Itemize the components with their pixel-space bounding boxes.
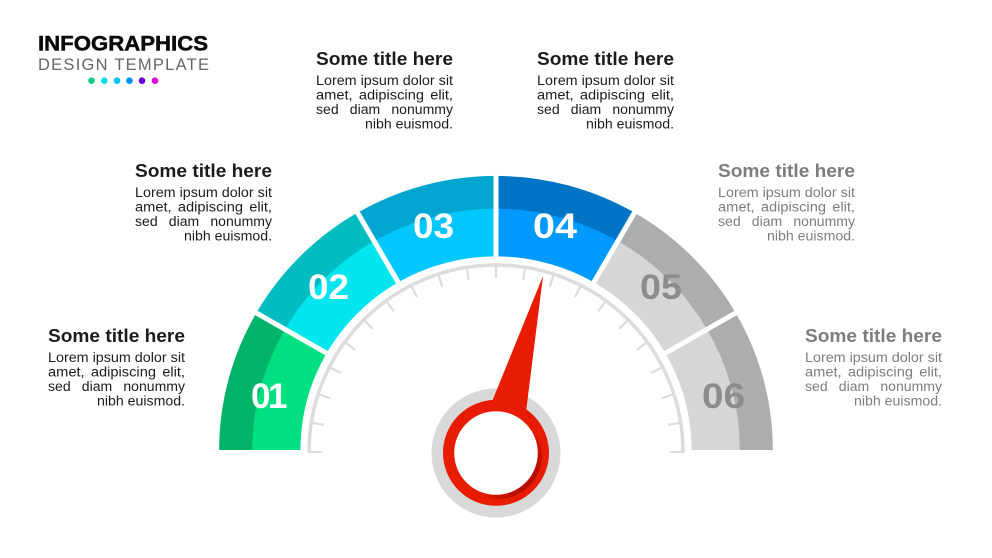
text block 2: amet, adipiscing elit, xyxy=(135,200,272,214)
text block 5: Lorem ipsum dolor sit xyxy=(718,185,855,200)
needle xyxy=(491,276,543,412)
hub white centre xyxy=(454,411,538,495)
hub red ring xyxy=(443,400,549,506)
text block 5: Some title here xyxy=(718,161,855,181)
text block 1: nibh euismod. xyxy=(97,394,185,408)
text block 6: amet, adipiscing elit, xyxy=(805,364,942,380)
segment 06 xyxy=(496,313,773,450)
segment 03 xyxy=(358,176,496,450)
logo: infographics design template xyxy=(38,32,209,84)
text block 4 xyxy=(537,49,674,132)
text block 5 xyxy=(718,161,855,244)
number 03: 03 xyxy=(413,207,454,246)
needle and hub xyxy=(432,276,560,518)
number 01: 01 xyxy=(251,377,287,416)
text block 2: Lorem ipsum dolor sit xyxy=(135,185,272,200)
text block 1: Lorem ipsum dolor sit xyxy=(48,350,185,365)
number 04: 04 xyxy=(533,207,578,246)
text block 6 xyxy=(805,326,942,408)
text block 4: Lorem ipsum dolor sit xyxy=(537,73,674,88)
semicircular gauge segments xyxy=(219,169,773,450)
text block 6: Some title here xyxy=(805,326,942,346)
text block 1: sed diam nonummy xyxy=(48,379,185,394)
text block 5: amet, adipiscing elit, xyxy=(718,200,855,214)
text block 3: amet, adipiscing elit, xyxy=(316,88,453,102)
logo title: INFOGRAPHICS xyxy=(38,32,208,56)
hub outer ring xyxy=(432,388,560,518)
segment 05 xyxy=(496,213,736,450)
text block 3: Lorem ipsum dolor sit xyxy=(316,73,453,88)
text block 2 xyxy=(135,161,272,244)
text block 6: sed diam nonummy xyxy=(805,379,942,394)
text block 4: sed diam nonummy xyxy=(537,102,674,117)
text block 2: sed diam nonummy xyxy=(135,214,272,229)
text block 1: Some title here xyxy=(48,326,185,346)
text block 1 xyxy=(48,326,185,408)
text block 6: nibh euismod. xyxy=(854,394,942,408)
number 02: 02 xyxy=(308,268,349,307)
segment 02 xyxy=(256,213,496,450)
logo subtitle: DESIGN TEMPLATE xyxy=(38,56,209,74)
text block 3: Some title here xyxy=(316,49,453,69)
gauge scale arc with ticks xyxy=(308,264,684,452)
logo dots xyxy=(88,77,158,84)
text block 4: amet, adipiscing elit, xyxy=(537,88,674,102)
text block 3: nibh euismod. xyxy=(365,116,453,132)
text block 3 xyxy=(316,49,453,132)
number 05: 05 xyxy=(640,268,682,307)
segment 04 xyxy=(496,176,634,450)
segment 01 xyxy=(219,313,496,450)
text block 5: sed diam nonummy xyxy=(718,214,855,229)
text block 3: sed diam nonummy xyxy=(316,102,453,117)
number 06: 06 xyxy=(702,377,745,416)
text block 4: nibh euismod. xyxy=(586,116,674,132)
text block 6: Lorem ipsum dolor sit xyxy=(805,350,942,365)
hub ring shadow xyxy=(454,411,542,499)
text block 2: nibh euismod. xyxy=(184,228,272,244)
text block 4: Some title here xyxy=(537,49,674,69)
text block 2: Some title here xyxy=(135,161,272,181)
text block 5: nibh euismod. xyxy=(767,228,855,244)
text block 1: amet, adipiscing elit, xyxy=(48,364,185,380)
